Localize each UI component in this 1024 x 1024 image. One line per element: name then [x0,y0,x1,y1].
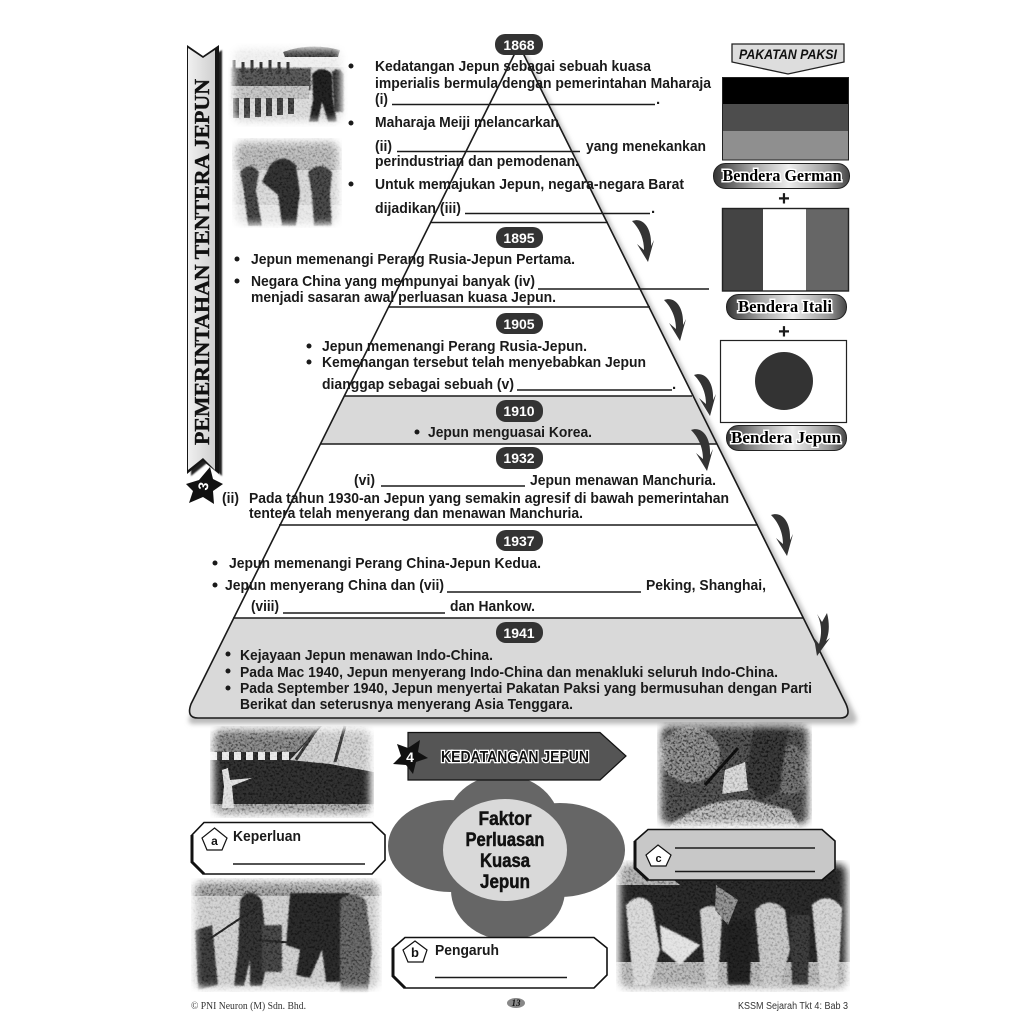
timeline section: 1932: 1932 [503,450,535,466]
label: Pakatan Paksi: PAKATAN PAKSI [739,46,838,62]
timeline section: 1905: dianggap sebagai sebuah (v) [322,376,514,393]
timeline section: 1937: Peking, Shanghai, [646,577,766,594]
infographic page [186,34,859,1012]
section banner: Kedatangan Jepun [408,732,626,780]
flag: Japan [720,340,846,422]
answer box a: Keperluan: Keperluan [233,828,301,845]
timeline section: 1941 [226,622,812,713]
timeline section: 1868: . [656,91,660,108]
timeline section: 1937: Jepun menyerang China dan (vii) [225,577,444,594]
label: Pakatan Paksi [732,44,844,74]
footer chapter label: KSSM Sejarah Tkt 4: Bab 3 [738,1001,848,1012]
timeline section: 1910: 1910 [503,403,535,419]
page number [507,998,525,1008]
timeline section: 1868: perindustrian dan pemodenan. [375,153,579,170]
timeline section: 1932: (ii) [222,490,239,507]
timeline section: 1895: Negara China yang mempunyai banyak (iv) [251,273,535,290]
label: Bendera Jepun: Bendera Jepun [731,428,842,447]
timeline section: 1895: 1895 [503,230,535,246]
answer box b: Pengaruh: Pengaruh [435,942,499,959]
section banner: Kedatangan Jepun: KEDATANGAN JEPUN [441,749,589,766]
timeline section: 1941: Pada Mac 1940, Jepun menyerang Indo-China dan menakluki seluruh Indo-China. [240,664,778,681]
year badge 1868 [495,34,543,55]
ribbon title text: PEMERINTAHAN TENTERA JEPUN [190,79,214,445]
timeline section: 1932: (vi) [354,472,375,489]
bullets [348,64,354,186]
timeline section: 1932: tentera telah menyerang dan menawan Manchuria. [249,505,583,522]
timeline section: 1937: dan Hankow. [450,598,535,615]
timeline section: 1868: Untuk memajukan Jepun, negara-negara Barat [375,176,684,193]
flag: Italy [722,208,849,291]
photo: surrender of soldiers [191,878,382,992]
timeline section: 1932: Pada tahun 1930-an Jepun yang semakin agresif di bawah pemerintahan [249,490,729,507]
timeline section: 1905 [306,313,676,393]
star badge 4 [393,740,428,774]
photo: wrecked ship [210,726,374,818]
label: Bendera Itali [726,294,846,320]
timeline section: 1937: (viii) [251,598,279,615]
star badge 3 [186,467,223,504]
label: Bendera Itali: Bendera Itali [738,297,832,316]
timeline section: 1937: Jepun memenangi Perang China-Jepun Kedua. [229,555,541,572]
flower title text [466,809,544,893]
timeline section: 1905: Jepun memenangi Perang Rusia-Jepun. [322,338,587,355]
flower diagram [388,775,625,940]
footer copyright: © PNI Neuron (M) Sdn. Bhd. [191,1001,306,1012]
timeline section: 1941: Berikat dan seterusnya menyerang Asia Tenggara. [240,696,573,713]
timeline section: 1941: 1941 [503,625,535,641]
star badge 3: 3 [195,481,212,491]
timeline section: 1937: 1937 [503,533,535,549]
plus sign: + [778,188,790,210]
timeline section: 1868: (i) [375,91,388,108]
timeline section: 1895 [234,227,709,306]
answer box c [635,830,835,880]
timeline section: 1868: yang menekankan [586,138,706,155]
title ribbon [187,45,222,476]
timeline section: 1905: . [672,376,676,393]
timeline section: 1905: 1905 [503,316,535,332]
flower title text: Kuasa [480,851,530,872]
timeline section: 1868: dijadikan (iii) [375,200,461,217]
timeline section: 1895: Jepun memenangi Perang Rusia-Jepun Pertama. [251,251,575,268]
photo: troops parade [228,43,348,127]
label: Bendera Jepun [726,426,846,450]
flower title text: Faktor [478,809,532,830]
answer box b: Pengaruh [393,938,607,988]
pyramid [189,45,857,724]
photo: soldier in forest [657,722,812,828]
answer box a: Keperluan [192,822,385,874]
timeline section: 1868: Kedatangan Jepun sebagai sebuah kuasa [375,58,652,75]
timeline section: 1905: Kemenangan tersebut telah menyebabkan Jepun [322,354,646,371]
label: Bendera German: Bendera German [722,166,842,185]
timeline section: 1868: . [651,200,655,217]
timeline section: 1937 [212,530,766,615]
curved arrows along pyramid [632,220,830,656]
page number: 13 [512,998,521,1008]
timeline section: 1910 [414,400,592,441]
flower centre [443,799,567,901]
timeline section: 1868: imperialis bermula dengan pemerintahan Maharaja [375,75,712,92]
timeline section: 1895: menjadi sasaran awal perluasan kuasa Jepun. [251,289,556,306]
answer box a: Keperluan: a [211,834,218,848]
flower title text: Jepun [480,872,530,893]
timeline section: 1868: Maharaja Meiji melancarkan [375,114,559,131]
timeline section: 1868 [348,58,712,217]
timeline section: 1868: (ii) [375,138,392,155]
photo: soldiers walking [232,138,342,228]
answer box b: Pengaruh: b [411,945,419,960]
photo: officers marching with flag [616,860,850,992]
timeline section: 1941: Kejayaan Jepun menawan Indo-China. [240,647,493,664]
answer box c: c [655,853,662,865]
timeline section: 1932 [222,447,729,522]
timeline section: 1941: Pada September 1940, Jepun menyertai Pakatan Paksi yang bermusuhan dengan Parti [240,680,812,697]
plus sign: + [778,321,790,343]
flag: Germany [722,77,849,160]
timeline section: 1910: Jepun menguasai Korea. [428,424,592,441]
flower title text: Perluasan [466,830,544,851]
timeline section: 1932: Jepun menawan Manchuria. [530,472,716,489]
year badge 1868: 1868 [503,37,535,53]
star badge 4: 4 [406,749,414,765]
